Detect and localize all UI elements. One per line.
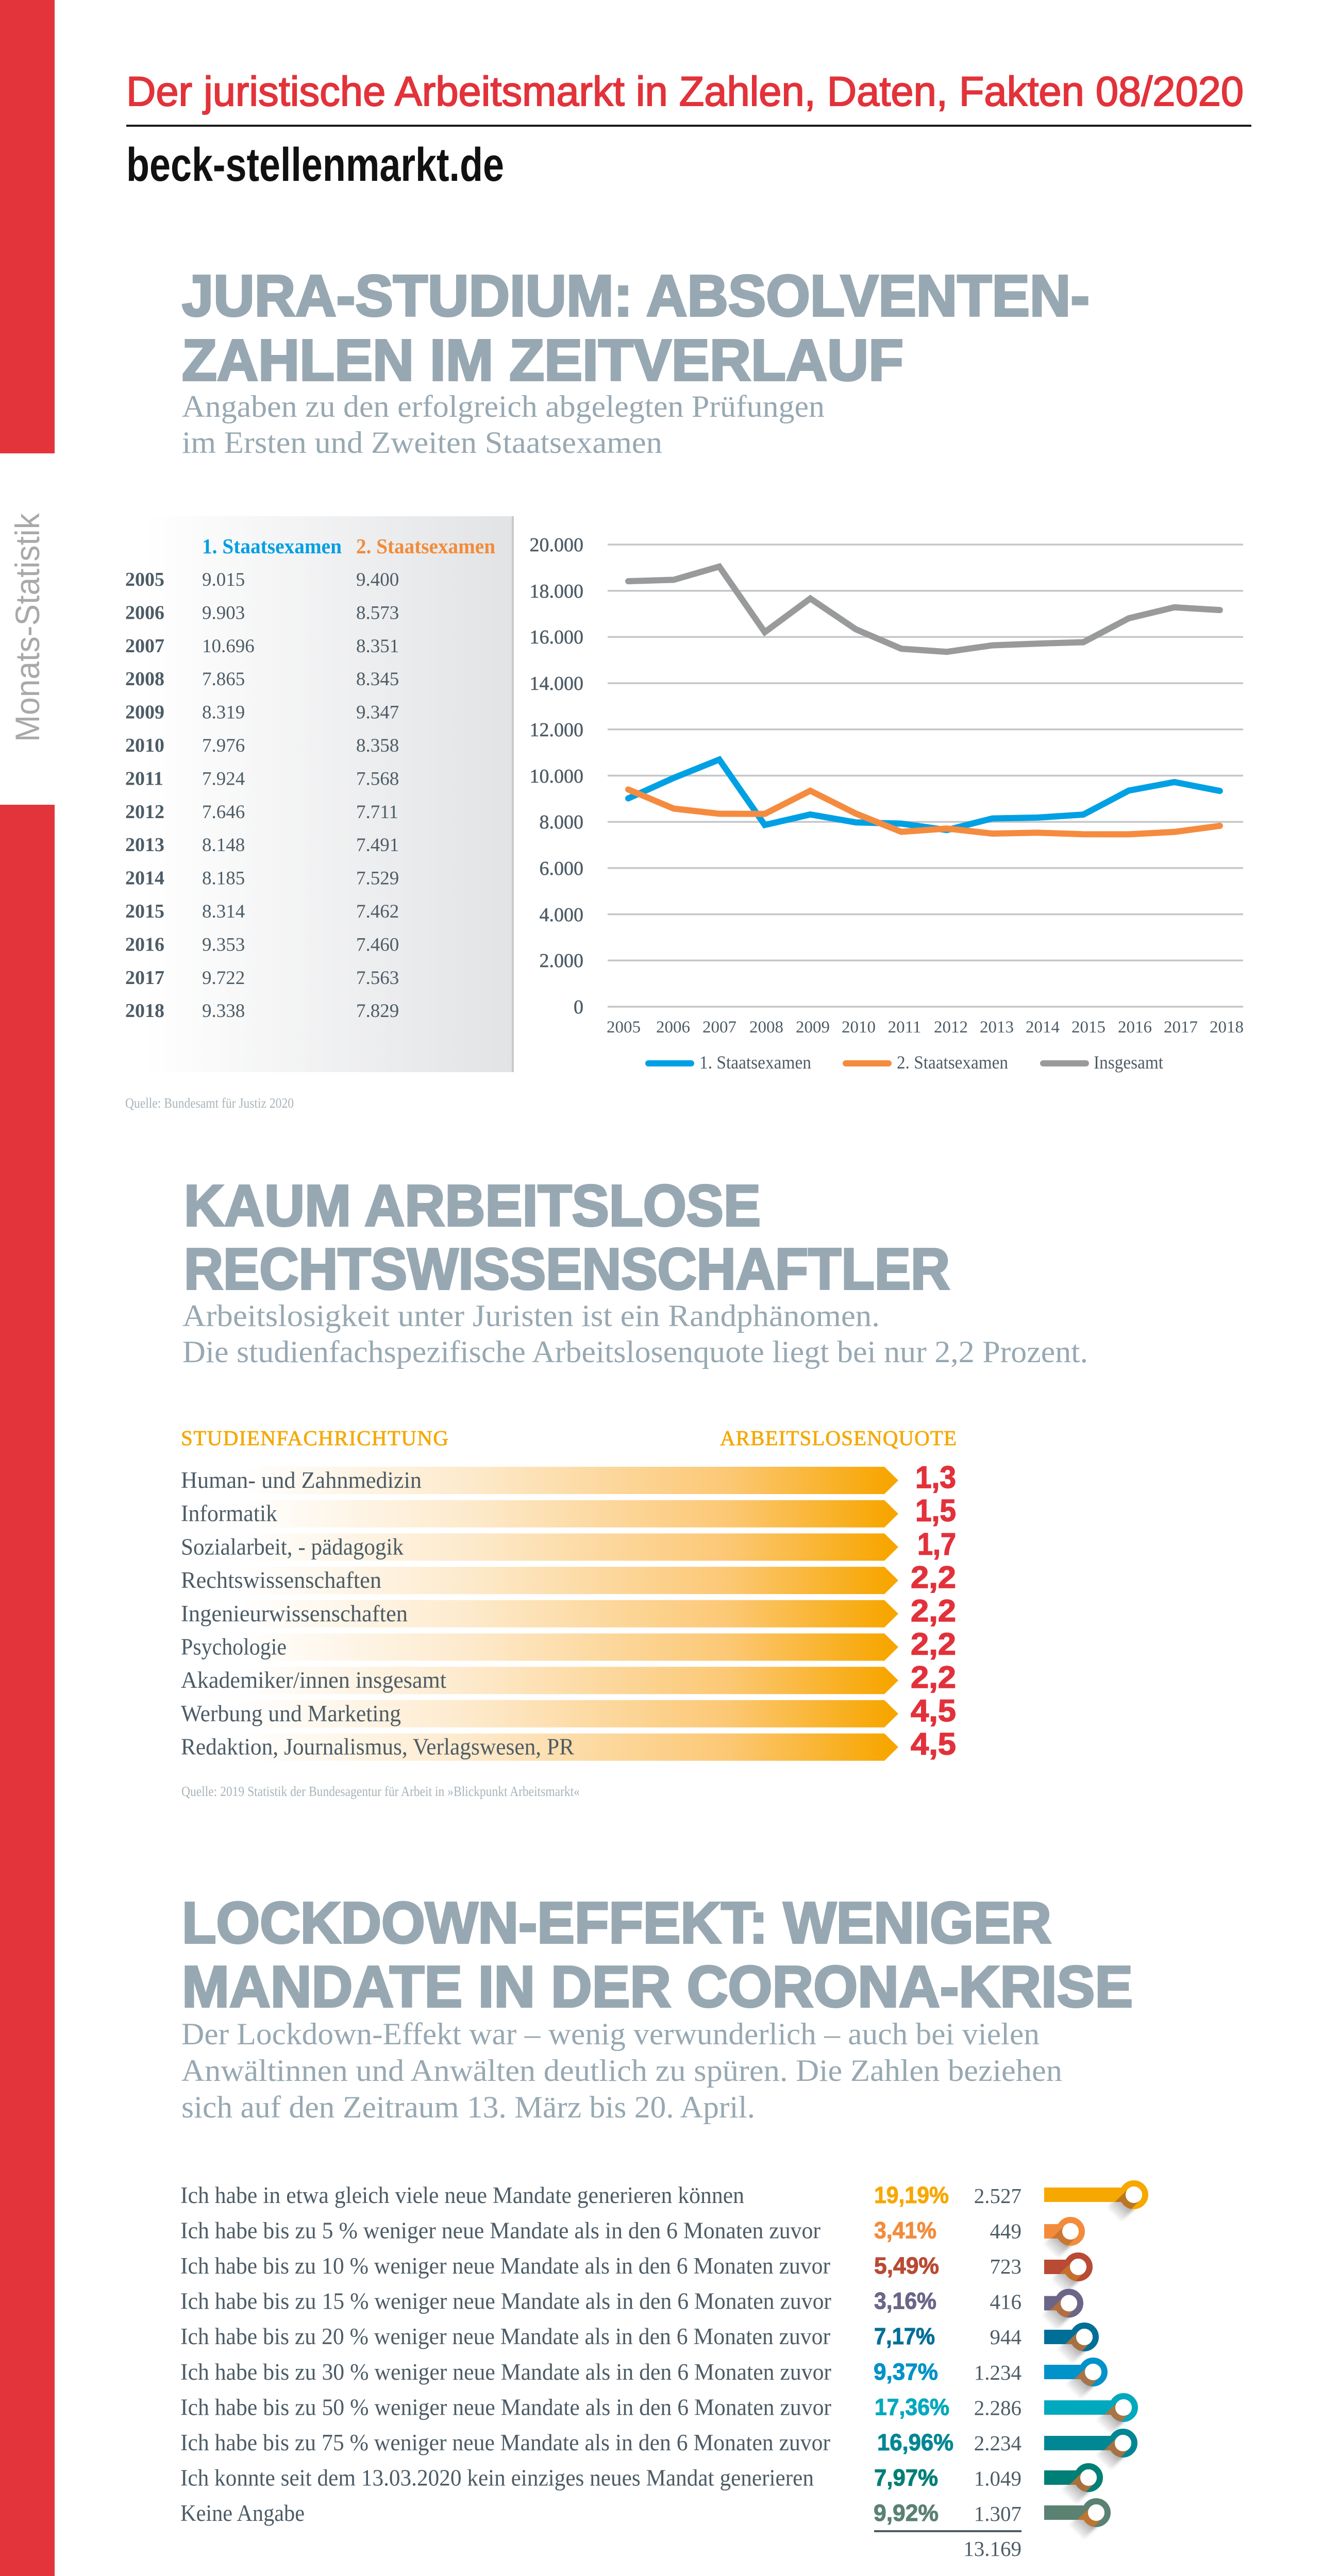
data table: 8.319 <box>202 702 245 723</box>
data table: 7.529 <box>356 868 399 889</box>
data table: 2009 <box>125 702 164 723</box>
subheading: Arbeitslosigkeit unter Juristen ist ein Randphänomen. <box>182 1299 880 1333</box>
data table: 2013 <box>125 834 164 856</box>
lollipop bars <box>1042 2183 1145 2539</box>
data table: 8.351 <box>356 636 399 657</box>
percentages: 5,49% <box>874 2252 939 2279</box>
line chart: 2014 <box>1026 1018 1060 1037</box>
quota values: 1,7 <box>917 1527 956 1561</box>
data table: 9.347 <box>356 702 399 723</box>
line chart: 2011 <box>888 1018 921 1037</box>
heading: MANDATE IN DER CORONA-KRISE <box>182 1954 1133 2019</box>
header rule <box>126 125 1251 127</box>
arrow bars <box>232 1467 898 1761</box>
line chart: 20.000 <box>530 534 583 556</box>
red side bar bottom <box>0 805 55 2576</box>
data table: 2016 <box>125 934 164 955</box>
subheading: Die studienfachspezifische Arbeitslosenquote liegt bei nur 2,2 Prozent. <box>182 1335 1088 1369</box>
percentages: 17,36% <box>875 2394 949 2420</box>
source note: Quelle: Bundesamt für Justiz 2020 <box>125 1095 294 1111</box>
statement labels: Ich konnte seit dem 13.03.2020 kein einziges neues Mandat generieren <box>180 2465 814 2490</box>
row labels: Psychologie <box>181 1634 287 1660</box>
subheading: Der Lockdown-Effekt war – wenig verwunderlich – auch bei vielen <box>181 2017 1040 2051</box>
percentages: 16,96% <box>877 2429 953 2455</box>
counts: 723 <box>990 2255 1021 2278</box>
heading: RECHTSWISSENSCHAFTLER <box>184 1236 950 1301</box>
data table: 7.829 <box>356 1001 399 1022</box>
heading: JURA-STUDIUM: ABSOLVENTEN- <box>182 263 1090 328</box>
row labels: Rechtswissenschaften <box>181 1567 381 1593</box>
panel: Lockdown-Effekt <box>180 1890 1145 2576</box>
counts: 449 <box>990 2219 1021 2243</box>
heading: LOCKDOWN-EFFEKT: WENIGER <box>182 1890 1051 1955</box>
line chart: 10.000 <box>530 766 583 787</box>
counts: 2.527 <box>974 2184 1021 2208</box>
row labels: Sozialarbeit, - pädagogik <box>181 1534 404 1560</box>
quota values: 2,2 <box>911 1660 956 1694</box>
data table: 9.338 <box>202 1001 245 1022</box>
data table: 2006 <box>125 602 164 623</box>
quota values <box>911 1460 956 1761</box>
percentages: 7,17% <box>874 2323 935 2349</box>
row labels: Human- und Zahnmedizin <box>181 1467 422 1493</box>
data table: 8.314 <box>202 901 245 922</box>
counts: 2.234 <box>974 2431 1021 2455</box>
panel: Arbeitslosigkeit <box>181 1173 1088 1799</box>
quota values: 1,5 <box>915 1494 956 1528</box>
subheading: sich auf den Zeitraum 13. März bis 20. April. <box>181 2090 755 2124</box>
data table: 2005 <box>125 569 164 590</box>
line chart: 12.000 <box>530 719 583 741</box>
data table: 2018 <box>125 1000 164 1022</box>
data table: 9.015 <box>202 569 245 590</box>
source note: Quelle: 2019 Statistik der Bundesagentur für Arbeit in »Blickpunkt Arbeitsmarkt« <box>181 1784 580 1799</box>
header <box>126 69 1251 191</box>
line chart: 2005 <box>607 1018 641 1037</box>
statement labels: Ich habe bis zu 10 % weniger neue Mandate als in den 6 Monaten zuvor <box>180 2253 830 2279</box>
row labels: Informatik <box>181 1501 277 1527</box>
data table: 2. Staatsexamen <box>356 534 495 558</box>
row labels <box>181 1467 574 1760</box>
line chart: 2007 <box>702 1018 736 1037</box>
data table: 7.460 <box>356 934 399 955</box>
quota values: 1,3 <box>915 1460 956 1495</box>
data table: 7.711 <box>356 802 398 823</box>
legend: 1. Staatsexamen <box>699 1052 811 1073</box>
counts <box>874 2184 1021 2561</box>
data table <box>125 516 514 1072</box>
row labels: Ingenieurwissenschaften <box>181 1601 408 1626</box>
line chart: 2018 <box>1210 1018 1244 1037</box>
percentages: 9,37% <box>874 2359 938 2385</box>
data table: 7.924 <box>202 768 245 789</box>
statement labels <box>180 2182 831 2526</box>
legend <box>645 1052 1163 1073</box>
line chart: 6.000 <box>539 858 583 879</box>
subheading: Anwältinnen und Anwälten deutlich zu spüren. Die Zahlen beziehen <box>181 2054 1062 2088</box>
statement labels: Ich habe bis zu 50 % weniger neue Mandate als in den 6 Monaten zuvor <box>180 2394 831 2420</box>
percentages: 7,97% <box>874 2464 938 2490</box>
percentages: 3,41% <box>874 2217 936 2244</box>
data table: 8.185 <box>202 868 245 889</box>
line chart: 2008 <box>749 1018 783 1037</box>
subheading: Angaben zu den erfolgreich abgelegten Prüfungen <box>182 389 825 423</box>
line chart: 2.000 <box>539 950 583 972</box>
line chart: 2012 <box>934 1018 968 1037</box>
line chart: 2006 <box>656 1018 690 1037</box>
line chart: 2010 <box>842 1018 876 1037</box>
quota values: 2,2 <box>911 1594 956 1628</box>
data table: 9.400 <box>356 569 399 590</box>
statement labels: Ich habe in etwa gleich viele neue Mandate generieren können <box>180 2182 744 2208</box>
data table: 10.696 <box>202 636 255 657</box>
percentages: 3,16% <box>874 2288 936 2314</box>
counts: 13.169 <box>963 2537 1021 2561</box>
statement labels: Ich habe bis zu 75 % weniger neue Mandate als in den 6 Monaten zuvor <box>180 2430 830 2455</box>
data table: 7.976 <box>202 735 245 756</box>
line chart: 2013 <box>980 1018 1014 1037</box>
data table: 8.148 <box>202 835 245 856</box>
statement labels: Keine Angabe <box>180 2500 305 2526</box>
line chart: 2009 <box>796 1018 830 1037</box>
red side bar top <box>0 0 55 453</box>
data table: 8.573 <box>356 602 399 623</box>
counts: 1.234 <box>974 2361 1021 2384</box>
data table: 9.722 <box>202 968 245 989</box>
line chart: 18.000 <box>530 581 583 602</box>
column headers: STUDIENFACHRICHTUNG <box>181 1426 448 1450</box>
data table: 9.353 <box>202 934 245 955</box>
background number scatter <box>546 2484 1217 2576</box>
subheading: im Ersten und Zweiten Staatsexamen <box>182 426 662 460</box>
data table: 2015 <box>125 901 164 922</box>
data table: 2007 <box>125 635 164 657</box>
statement labels: Ich habe bis zu 20 % weniger neue Mandate als in den 6 Monaten zuvor <box>180 2324 830 2349</box>
line: 1. Staatsexamen <box>628 759 1220 830</box>
counts: 1.049 <box>974 2466 1021 2490</box>
line chart <box>530 534 1244 1073</box>
data table: 7.865 <box>202 669 245 690</box>
logo text: beck-stellenmarkt.de <box>126 139 504 191</box>
quota values: 4,5 <box>911 1693 956 1728</box>
quota values: 2,2 <box>911 1627 956 1661</box>
row labels: Akademiker/innen insgesamt <box>181 1667 446 1693</box>
line chart: 8.000 <box>539 811 583 833</box>
statement labels: Ich habe bis zu 5 % weniger neue Mandate als in den 6 Monaten zuvor <box>180 2218 820 2244</box>
data table: 7.646 <box>202 802 245 823</box>
percentages: 9,92% <box>874 2500 939 2526</box>
subheading <box>181 2017 1062 2124</box>
quota values: 4,5 <box>911 1727 956 1761</box>
heading: KAUM ARBEITSLOSE <box>184 1173 761 1238</box>
column headers <box>181 1426 957 1450</box>
data table: 1. Staatsexamen <box>202 534 342 558</box>
data table: 8.358 <box>356 735 399 756</box>
data table: 7.563 <box>356 968 399 989</box>
data table: 7.568 <box>356 768 399 789</box>
data table: 2011 <box>125 768 163 789</box>
line chart: 2015 <box>1071 1018 1105 1037</box>
data table: 9.903 <box>202 602 245 623</box>
percentages <box>874 2182 953 2526</box>
line chart: 2017 <box>1164 1018 1198 1037</box>
line: Insgesamt <box>628 567 1220 652</box>
heading: ZAHLEN IM ZEITVERLAUF <box>182 328 903 393</box>
legend: Insgesamt <box>1094 1052 1163 1073</box>
heading <box>182 1890 1133 2019</box>
statement labels: Ich habe bis zu 15 % weniger neue Mandate als in den 6 Monaten zuvor <box>180 2289 831 2314</box>
heading <box>182 263 1090 393</box>
subheading <box>182 389 825 460</box>
line chart: 4.000 <box>539 904 583 926</box>
counts: 2.286 <box>974 2396 1021 2419</box>
line chart: 0 <box>574 996 583 1018</box>
panel: Jura-Studium <box>125 263 1244 1111</box>
counts: 416 <box>990 2290 1021 2314</box>
line chart: 14.000 <box>530 673 583 694</box>
counts: 944 <box>990 2325 1021 2349</box>
data table: 2012 <box>125 801 164 823</box>
row labels: Werbung und Marketing <box>181 1701 401 1726</box>
statement labels: Ich habe bis zu 30 % weniger neue Mandate als in den 6 Monaten zuvor <box>180 2359 831 2385</box>
title: Der juristische Arbeitsmarkt in Zahlen, Daten, Fakten 08/2020 <box>126 69 1244 115</box>
vertical label: Monats-Statistik: Monats-Statistik <box>8 513 46 742</box>
legend: 2. Staatsexamen <box>897 1052 1008 1073</box>
line chart: 16.000 <box>530 626 583 648</box>
data table: 2017 <box>125 967 164 989</box>
row labels: Redaktion, Journalismus, Verlagswesen, PR <box>181 1734 574 1760</box>
heading <box>184 1173 950 1301</box>
data table: 2010 <box>125 735 164 756</box>
counts: 1.307 <box>974 2502 1021 2526</box>
percentages: 19,19% <box>874 2182 949 2208</box>
data table: 7.462 <box>356 901 399 922</box>
subheading <box>182 1299 1088 1369</box>
panel: Zahl des Monats <box>179 2484 1217 2576</box>
data table: 2014 <box>125 868 164 889</box>
quota values: 2,2 <box>911 1560 956 1595</box>
data table: 2008 <box>125 668 164 690</box>
line: 2. Staatsexamen <box>628 789 1220 834</box>
data table: 7.491 <box>356 835 399 856</box>
line chart: 2016 <box>1118 1018 1152 1037</box>
data table: 8.345 <box>356 669 399 690</box>
column headers: ARBEITSLOSENQUOTE <box>720 1426 957 1450</box>
